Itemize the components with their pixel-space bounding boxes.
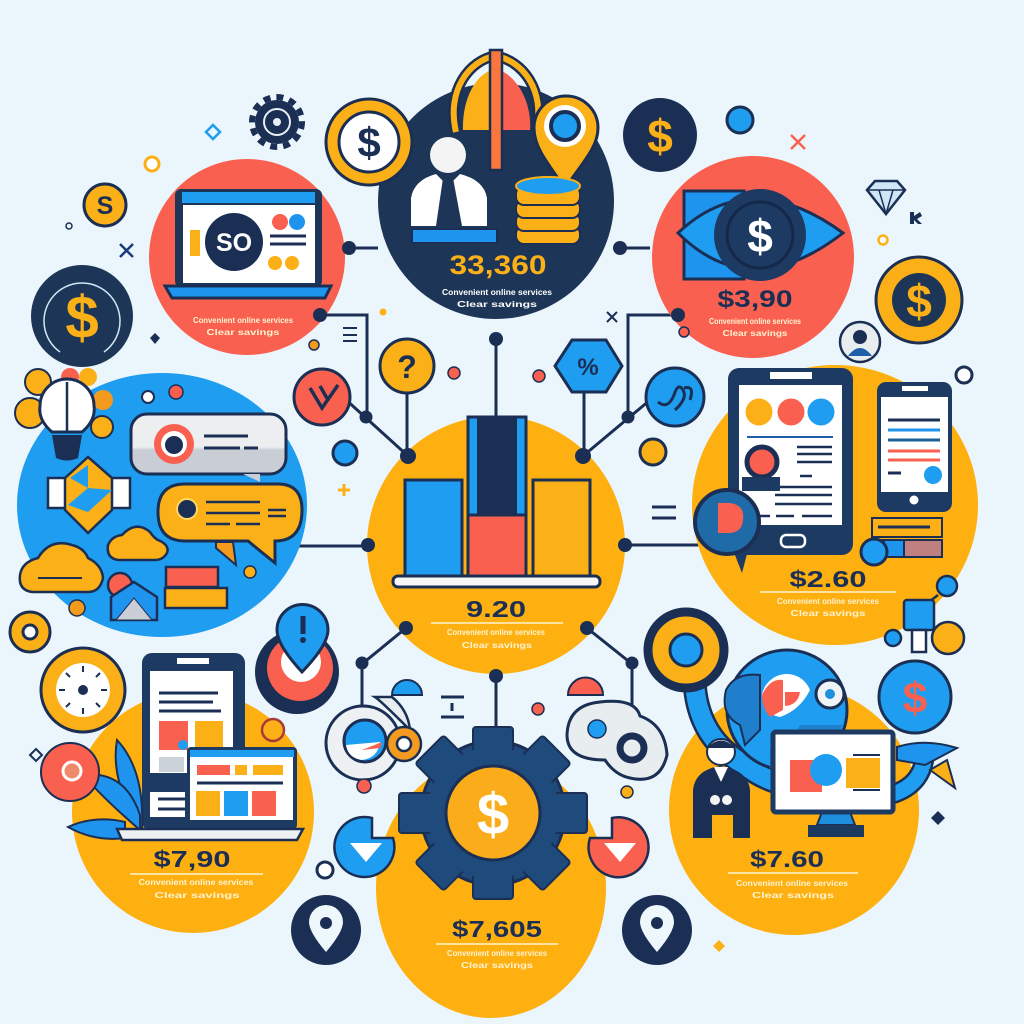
caption: laptop panel: Clear savings — [206, 328, 280, 337]
icon: map pin — [534, 96, 598, 188]
icon: coin navy left: $ — [65, 284, 99, 351]
value: eye: $3,90 — [718, 286, 792, 313]
icon: question badge — [380, 339, 434, 393]
small dots near gear — [317, 703, 633, 878]
panel: eye top right — [652, 156, 854, 358]
icon: small coin left: S — [97, 192, 113, 220]
icon: laptop — [165, 189, 331, 298]
panel: laptop top left — [149, 159, 345, 355]
caption: phones — [760, 592, 896, 618]
icon: coin navy top right — [623, 98, 697, 172]
connector dots — [313, 241, 685, 683]
icon: gamepad left — [326, 680, 422, 793]
icon: light bulb — [15, 368, 113, 460]
icon: link badge — [646, 368, 704, 426]
icon: clouds — [20, 527, 168, 592]
icon: leaves — [68, 740, 142, 839]
icon: coin right — [876, 257, 962, 343]
icon: blue swirl — [648, 612, 957, 795]
icon: person in suit — [693, 739, 750, 838]
panel: blue chat left — [15, 368, 307, 637]
icon: phone — [877, 382, 952, 512]
caption: devices: Clear savings — [154, 891, 240, 900]
panel: gear bottom centre — [376, 727, 606, 1018]
caption: laptop panel — [193, 316, 294, 337]
caption: gear — [436, 944, 558, 970]
caption: presenter: Clear savings — [752, 891, 835, 900]
icon: coin right: $ — [906, 275, 932, 327]
icon: blue down badge — [334, 817, 394, 877]
caption: top centre: Clear savings — [457, 300, 538, 309]
icon: tablet — [142, 653, 245, 831]
icon: coin navy top right: $ — [647, 110, 673, 162]
panel: lower right presenter — [648, 612, 957, 935]
caption: devices: Convenient online services — [138, 878, 254, 887]
caption: centre — [431, 623, 563, 650]
icon: diamond — [867, 181, 905, 214]
icon: gamepad right — [567, 678, 667, 779]
icon: play bubble — [695, 490, 759, 573]
icon: question badge: ? — [397, 349, 417, 385]
panel: lower left devices — [68, 653, 314, 933]
value: top centre: 33,360 — [450, 250, 546, 280]
caption: top centre: Convenient online services — [442, 288, 553, 297]
decorative accents — [30, 125, 945, 952]
icon: dollar badge right — [879, 661, 951, 733]
icon: small yellow dot centre right — [640, 439, 666, 465]
icon: monitor — [773, 732, 893, 837]
icon: arch — [454, 50, 538, 170]
icon: blue dot top — [727, 107, 753, 133]
value: devices: $7,90 — [154, 846, 230, 872]
icon: coin stack — [516, 177, 580, 244]
caption: devices — [130, 874, 263, 900]
icon: coin top left large — [326, 99, 412, 185]
value: presenter: $7.60 — [750, 846, 824, 872]
caption: gear: Convenient online services — [447, 949, 548, 958]
caption: phones: Convenient online services — [777, 597, 880, 606]
icon: laptop — [117, 747, 303, 840]
icon: blocks and envelope — [108, 567, 227, 620]
caption: presenter: Convenient online services — [736, 879, 849, 888]
icon: person at desk — [411, 137, 497, 243]
icon: pin badge left — [291, 895, 361, 965]
icon: gear: $ — [477, 782, 509, 847]
caption: eye: Clear savings — [722, 329, 788, 338]
icon: speech bubble yellow — [158, 484, 302, 565]
icon: percent hexagon — [555, 340, 622, 392]
icon: hexagon — [48, 457, 130, 533]
caption: gear: Clear savings — [461, 961, 534, 970]
icon: dollar badge right: $ — [903, 674, 927, 723]
icon: coral down badge — [589, 817, 649, 877]
icon: small blue dot centre left — [333, 441, 357, 465]
panel: centre chart — [367, 416, 625, 674]
caption: phones: Clear savings — [790, 609, 866, 618]
icon: laptop: SO — [216, 229, 252, 257]
icon: coin top left large: $ — [357, 119, 381, 166]
caption: centre: Convenient online services — [447, 628, 546, 637]
caption: eye: Convenient online services — [709, 317, 801, 326]
icon: small yellow badge left — [10, 612, 50, 652]
panel: phones right — [692, 365, 978, 645]
small coral dot — [262, 719, 284, 741]
icon: target with pin — [255, 604, 339, 714]
dots on blue panel — [69, 385, 256, 616]
icon: person badge right — [840, 322, 880, 362]
icon: cards — [861, 518, 942, 565]
icon: gear — [399, 727, 587, 899]
icon: eye with coin: $ — [747, 210, 773, 262]
icon: clock — [41, 648, 125, 732]
caption: centre: Clear savings — [462, 641, 533, 650]
value: centre: 9.20 — [466, 596, 526, 622]
icon: small devices right — [885, 576, 964, 654]
icon: coral target — [41, 743, 99, 801]
bar chart — [393, 417, 600, 587]
panel: top centre navy — [378, 50, 614, 319]
icon: small coin left — [84, 184, 126, 226]
icon: percent hexagon: % — [577, 354, 599, 381]
value: phones: $2.60 — [790, 566, 866, 592]
icon: speech bubble grey — [131, 414, 286, 482]
caption: presenter — [728, 873, 858, 900]
icon: cross top right — [791, 135, 805, 149]
icon: eye with coin — [678, 189, 843, 281]
value: gear: $7,605 — [452, 916, 542, 942]
icon: coral arrow badge — [294, 369, 350, 425]
icon: pin badge right — [622, 895, 692, 965]
caption: laptop panel: Convenient online services — [193, 316, 294, 325]
icon: coin navy left — [31, 265, 133, 367]
icon: ring right — [956, 367, 972, 383]
icon: gear top left — [252, 97, 302, 147]
icon: tablet — [728, 368, 853, 555]
caption: top centre — [442, 288, 553, 309]
caption: eye — [709, 317, 801, 338]
